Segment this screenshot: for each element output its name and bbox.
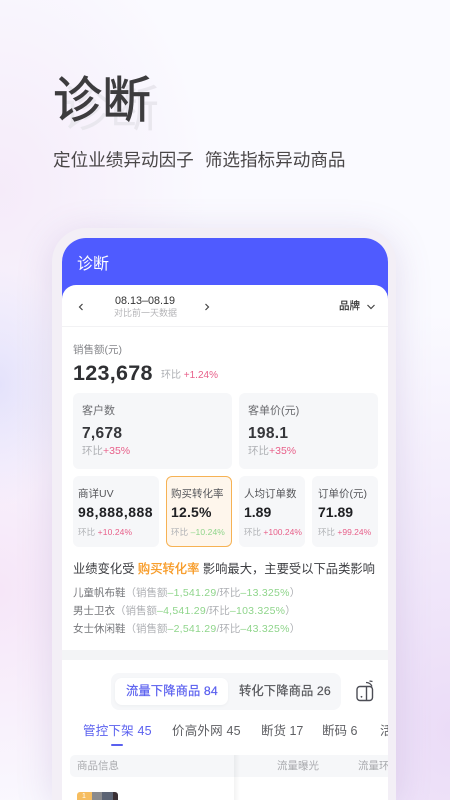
tab: underline <box>111 744 123 746</box>
card: detail UV: 环比 +10.24% <box>78 527 132 537</box>
card: orders per person: 人均订单数 <box>244 488 296 500</box>
icon: next date <box>205 304 210 310</box>
category 2: 男士卫衣（销售额–4,541.29/环比–103.325%） <box>73 605 296 617</box>
card: customers: 环比+35% <box>82 445 130 457</box>
section divider band <box>62 650 388 660</box>
card: average price: 环比+35% <box>248 445 296 457</box>
icon: rotate device <box>356 680 374 702</box>
sales value: 123,678 <box>73 361 153 385</box>
card: purchase conversion highlighted: 环比 –10.24% <box>171 527 225 537</box>
card: order price: 订单价(元) <box>318 488 367 500</box>
card: customers <box>73 393 232 469</box>
card: customers: 客户数 <box>82 405 115 417</box>
sales label: 销售额(元) <box>73 344 122 356</box>
column: traffic exposure: 流量曝光 <box>277 760 319 772</box>
icon: dropdown chevron <box>367 304 375 310</box>
brand selector: 品牌 <box>339 300 360 312</box>
card: detail UV <box>73 476 159 547</box>
tab: active: 管控下架 45 <box>83 724 152 738</box>
table header <box>70 755 388 777</box>
heading: 诊断 <box>53 74 159 137</box>
white content sheet top <box>62 285 388 327</box>
compare note: 对比前一天数据 <box>114 308 177 318</box>
card: detail UV: 商详UV <box>78 488 114 500</box>
inactive segment: 转化下降商品 26 <box>239 684 331 698</box>
card: order price <box>312 476 378 547</box>
rank badge: 1 <box>82 793 86 800</box>
active segment <box>115 678 228 705</box>
column: product info: 商品信息 <box>77 760 119 772</box>
category 3: 女士休闲鞋（销售额–2,541.29/环比–43.325%） <box>73 623 300 635</box>
card: purchase conversion highlighted: 12.5% <box>171 504 212 520</box>
tab: missing size: 断码 6 <box>322 724 357 738</box>
card: orders per person <box>239 476 305 547</box>
card: order price: 环比 +99.24% <box>318 527 371 537</box>
tab: higher price: 价高外网 45 <box>172 724 241 738</box>
app header bar <box>62 238 388 300</box>
product thumbnail <box>77 792 118 800</box>
tab: out of stock: 断货 17 <box>261 724 303 738</box>
heading shadow: 诊断 <box>61 83 159 137</box>
segmented tabs <box>111 673 341 710</box>
card: average price: 客单价(元) <box>248 405 299 417</box>
insight headline: 业绩变化受 购买转化率 影响最大，主要受以下品类影响 <box>73 562 375 576</box>
card: order price: 71.89 <box>318 504 353 520</box>
app header title: 诊断 <box>77 256 109 273</box>
sales change: 环比 +1.24% <box>161 370 218 381</box>
card: average price: 198.1 <box>248 425 288 442</box>
frozen column shadow <box>234 755 240 800</box>
phone mockup <box>52 228 396 800</box>
card: purchase conversion highlighted: 购买转化率 <box>171 488 224 500</box>
category tabs <box>83 724 388 746</box>
phone screen <box>62 238 388 800</box>
card: orders per person: 环比 +100.24% <box>244 527 302 537</box>
card: orders per person: 1.89 <box>244 504 271 520</box>
subtitle: 定位业绩异动因子 筛选指标异动商品 <box>53 150 346 170</box>
category 1: 儿童帆布鞋（销售额–1,541.29/环比–13.325%） <box>73 587 300 599</box>
card: average price <box>239 393 378 469</box>
active segment label: 流量下降商品 84 <box>126 684 218 698</box>
heading text: 诊断 <box>53 74 151 128</box>
card: detail UV: 98,888,888 <box>78 504 153 520</box>
icon: previous date <box>78 304 83 310</box>
card: customers: 7,678 <box>82 425 122 442</box>
category list <box>73 587 300 635</box>
card: purchase conversion highlighted <box>166 476 232 547</box>
date range: 08.13–08.19 <box>115 295 175 307</box>
